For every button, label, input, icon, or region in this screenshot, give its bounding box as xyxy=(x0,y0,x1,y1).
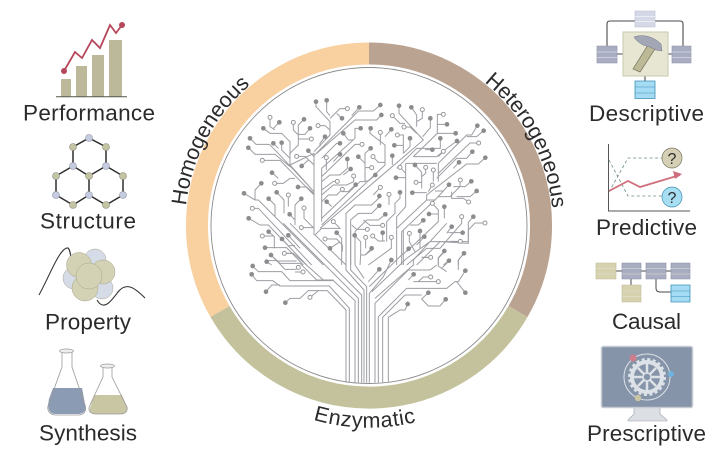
heading: Prescriptive: Prescriptive xyxy=(587,421,706,446)
tree open nodes xyxy=(250,107,487,299)
icon: predictive chart: ? xyxy=(668,190,677,207)
ring segment: homogeneous xyxy=(197,54,369,312)
tree upper branches xyxy=(244,100,485,265)
icon: predictive chart xyxy=(608,144,690,211)
label: Homogeneous: Homogeneous xyxy=(172,78,248,204)
label: Heterogeneous: Heterogeneous xyxy=(486,72,564,208)
label: Enzymatic: Enzymatic xyxy=(314,406,415,432)
icon: predictive chart: ? xyxy=(668,151,677,168)
heading: Predictive: Predictive xyxy=(596,215,697,240)
panel: central ring xyxy=(185,42,553,428)
panel: right column xyxy=(587,11,706,446)
icon: causal diagram xyxy=(596,263,690,302)
heading: Descriptive: Descriptive xyxy=(589,101,704,126)
heading: Causal: Causal xyxy=(612,309,681,334)
heading: Synthesis: Synthesis xyxy=(39,420,137,446)
icon: flasks xyxy=(48,349,127,415)
icon: performance chart xyxy=(56,22,127,97)
circuit tree xyxy=(242,98,488,383)
heading: Performance: Performance xyxy=(23,100,155,126)
panel: left column xyxy=(23,22,155,446)
heading: Structure: Structure xyxy=(40,208,136,234)
tree trunk and lower branches xyxy=(252,223,468,383)
heading: Property: Property xyxy=(45,310,132,334)
icon: hexagonal structure xyxy=(52,134,126,208)
icon: descriptive diagram xyxy=(597,11,691,98)
tree dots xyxy=(242,98,488,306)
icon: property cluster and curve xyxy=(39,248,145,305)
icon: monitor with gear xyxy=(602,346,692,421)
inner circle xyxy=(211,68,527,384)
ring segment: enzymatic xyxy=(220,312,518,398)
ring segment: heterogeneous xyxy=(369,53,541,311)
